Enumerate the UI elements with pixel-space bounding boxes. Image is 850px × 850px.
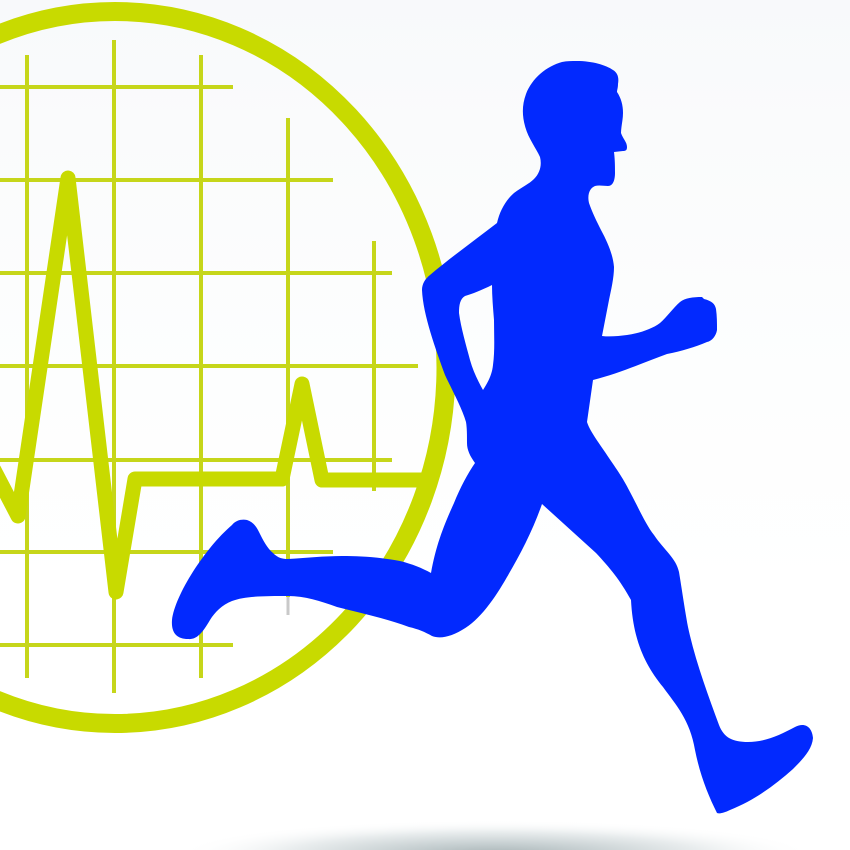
grid lines: [0, 40, 418, 693]
circle ring: [0, 12, 446, 724]
ground shadow: [175, 820, 815, 850]
runner silhouette: [172, 61, 813, 813]
grid line lower grey segment: [286, 597, 290, 615]
heartbeat line: [0, 178, 425, 592]
